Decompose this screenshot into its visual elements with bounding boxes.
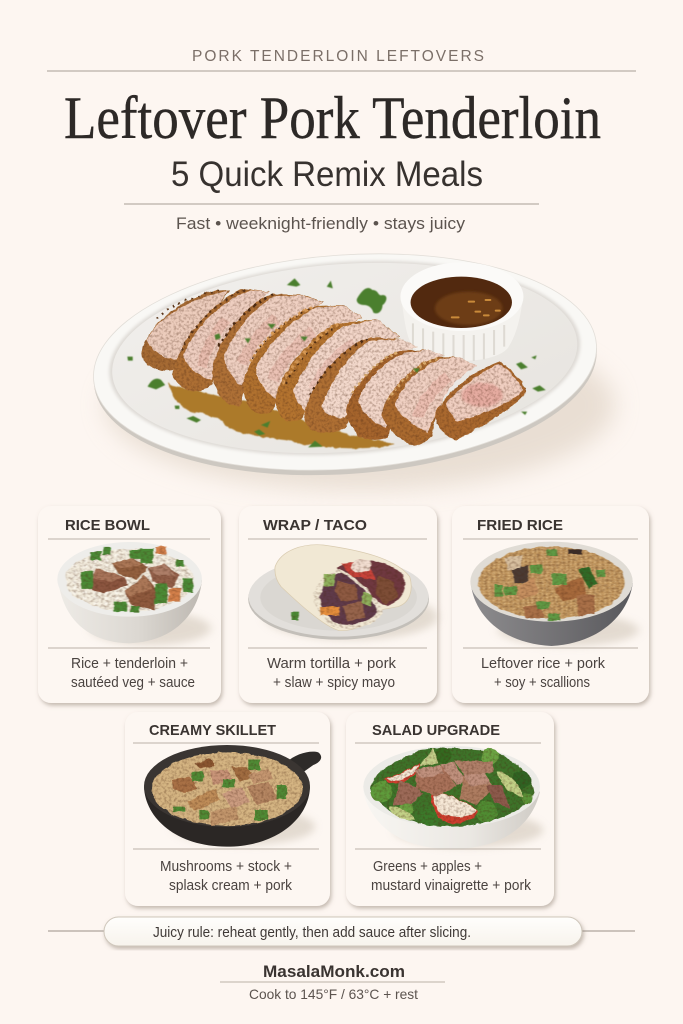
text: wrap description: Warm tortilla + pork (267, 655, 396, 672)
subtitle: 5 Quick Remix Meals (171, 155, 483, 194)
text: fried rice description: + soy + scallions (494, 674, 590, 691)
text: skillet description: splask cream + pork (169, 877, 292, 894)
text: salad description: Greens + apples + (373, 858, 482, 875)
parsley garnish (127, 278, 546, 447)
text: rice bowl description: Rice + tenderloin + (71, 655, 188, 672)
text: fried rice description: Leftover rice + pork (481, 655, 605, 672)
tortilla outer (275, 545, 411, 631)
icon: rice bowl photo (57, 542, 211, 645)
pan sauce (169, 383, 394, 448)
heading: fried rice: FRIED RICE (477, 517, 563, 534)
icon: fried rice bowl photo (470, 542, 639, 646)
hero image: pork tenderloin plate with sauce (86, 238, 615, 491)
callout: juicy rule: Juicy rule: reheat gently, then add sauce after slicing. (153, 925, 471, 941)
panel: wrap / taco (239, 506, 438, 703)
text: salad description: mustard vinaigrette + pork (371, 877, 531, 894)
title: Leftover Pork Tenderloin (64, 85, 601, 151)
text: skillet description (160, 858, 292, 894)
text: wrap description: + slaw + spicy mayo (273, 674, 395, 691)
text: rice bowl description: sautéed veg + sauce (71, 674, 195, 691)
footer: cooking temperature note: Cook to 145°F / 63°C + rest (249, 986, 418, 1002)
heading: creamy skillet: CREAMY SKILLET (149, 722, 276, 739)
callout: juicy rule (48, 917, 635, 946)
text: salad description (371, 858, 531, 894)
eyebrow heading: PORK TENDERLOIN LEFTOVERS (192, 48, 484, 65)
plate shadow (105, 320, 615, 490)
text: rice bowl description (71, 655, 195, 691)
panel: rice bowl (38, 506, 221, 703)
icon: skillet photo (144, 745, 321, 847)
heading: salad upgrade: SALAD UPGRADE (372, 722, 500, 739)
icon: wrap on plate photo (248, 545, 438, 640)
panel: salad upgrade (346, 712, 554, 906)
text: fried rice description (481, 655, 605, 691)
heading: wrap / taco: WRAP / TACO (263, 517, 367, 534)
footer: site name: MasalaMonk.com (263, 962, 405, 981)
ramekin with sauce (400, 262, 523, 361)
panel: creamy skillet (125, 712, 330, 906)
text: wrap description (267, 655, 396, 691)
icon: salad bowl photo (363, 746, 543, 849)
plate (86, 238, 604, 491)
text: skillet description: Mushrooms + stock + (160, 858, 292, 875)
heading: rice bowl: RICE BOWL (65, 517, 150, 534)
pork slices (142, 288, 526, 446)
panel: fried rice (452, 506, 649, 703)
tagline: Fast • weeknight-friendly • stays juicy (176, 214, 466, 233)
